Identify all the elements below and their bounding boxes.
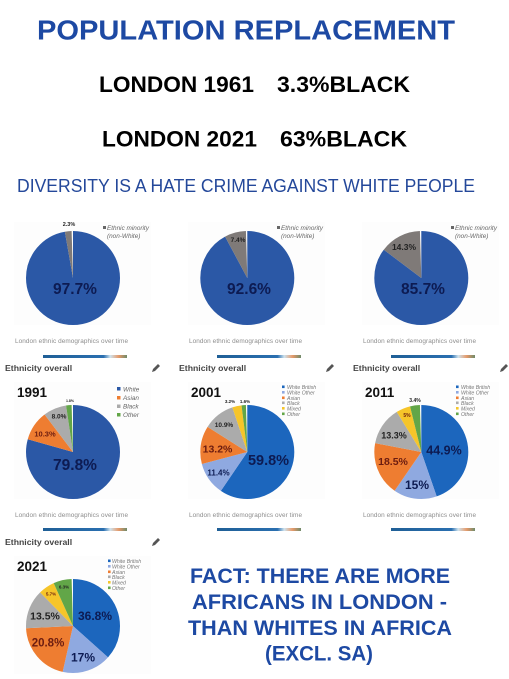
caption: London ethnic demographics over time (363, 512, 476, 519)
value labels: 10.3% (34, 430, 56, 438)
value labels: 1.6% (240, 399, 250, 404)
pie chart: 1961 (50, 254, 96, 302)
pie chart: 2021 (50, 602, 96, 650)
value labels: 8.0% (52, 414, 67, 420)
legend: Other (461, 412, 474, 418)
heading: Ethnicity overall (5, 363, 72, 373)
icon: pencil (500, 364, 508, 372)
legend: Black (287, 401, 300, 407)
legend: White (123, 386, 140, 394)
legend (117, 386, 140, 419)
legend: (non-White) (455, 233, 488, 240)
icon: pencil (326, 364, 334, 372)
legend: White British (287, 385, 316, 391)
legend: Ethnic minority (281, 225, 324, 232)
value labels: 3.4% (409, 398, 421, 404)
heading: Ethnicity overall (179, 363, 246, 373)
value labels: 85.7% (401, 281, 445, 298)
value labels: 44.9% (426, 444, 462, 458)
headline: London 1961: LONDON 1961 (99, 72, 254, 97)
legend: White Other (112, 564, 140, 570)
callout: fact: THAN WHITES IN AFRICA (188, 616, 452, 640)
panel: 1971 pie (188, 222, 325, 358)
panel: 1991 pie (5, 363, 160, 531)
value labels: 1.8% (66, 399, 75, 403)
value labels: 13.3% (381, 430, 407, 440)
legend: Asian (111, 570, 125, 576)
heading: Ethnicity overall (5, 537, 72, 547)
legend (282, 385, 316, 418)
pie chart: 1981 (398, 254, 445, 302)
caption: London ethnic demographics over time (363, 338, 476, 345)
value labels: 14.3% (392, 242, 416, 252)
legend (277, 225, 324, 240)
legend: White British (461, 385, 490, 391)
legend: Mixed (112, 580, 127, 586)
value labels (378, 398, 462, 492)
headline: London 2021: 63%BLACK (280, 126, 408, 152)
value labels: 5.7% (46, 592, 56, 596)
callout: fact: AFRICANS IN LONDON - (192, 590, 447, 614)
panel: 1981 pie (362, 222, 499, 358)
value labels: 20.8% (32, 638, 64, 650)
icon: pencil (152, 364, 160, 372)
value labels: 13.2% (203, 444, 233, 456)
value labels (53, 222, 97, 298)
value labels: 17% (71, 650, 95, 664)
year label: 2011 (365, 385, 395, 400)
heading: Ethnicity overall (353, 363, 420, 373)
value labels: 36.8% (78, 609, 112, 623)
value labels: 92.6% (227, 281, 271, 298)
value labels: 7.4% (231, 237, 246, 244)
legend: White Other (461, 390, 489, 396)
legend: Asian (122, 395, 139, 402)
headline: London 1961: 3.3%BLACK (277, 72, 411, 97)
legend: (non-White) (281, 233, 314, 240)
caption: London ethnic demographics over time (189, 338, 302, 345)
value labels: 13.5% (30, 610, 61, 622)
timeline bar (391, 528, 475, 531)
legend: White Other (287, 390, 315, 396)
value labels: 11.4% (207, 468, 230, 478)
legend: Mixed (461, 406, 476, 412)
year label: 2001 (191, 385, 222, 400)
icon: pencil (152, 538, 160, 546)
caption: London ethnic demographics over time (15, 512, 128, 519)
timeline bar (43, 355, 127, 358)
pie chart: 2001 (224, 428, 271, 476)
panel: 2001 pie (179, 363, 334, 531)
value labels (203, 399, 289, 478)
panel: 1961 pie (14, 222, 151, 358)
legend: White British (112, 559, 141, 565)
legend: Ethnic minority (107, 225, 150, 232)
callout: fact: (EXCL. SA) (265, 642, 373, 666)
panel: 2011 pie (353, 363, 508, 531)
headline: London 2021: LONDON 2021 (102, 126, 257, 152)
legend: Ethnic minority (455, 225, 498, 232)
year label: 1991 (17, 385, 48, 400)
value labels: 18.5% (378, 456, 409, 468)
legend (456, 385, 490, 418)
pie chart: 1971 (224, 255, 271, 302)
legend: Black (461, 401, 474, 407)
callout: fact (188, 564, 452, 666)
panel: 2021 pie (5, 537, 160, 674)
legend (103, 225, 150, 240)
value labels: 2.3% (63, 222, 75, 228)
pie chart: 2011 (398, 428, 445, 476)
legend: Other (112, 586, 125, 592)
value labels: 6.3% (59, 584, 69, 590)
legend: Mixed (287, 406, 302, 412)
value labels: 97.7% (53, 281, 97, 298)
value labels (30, 584, 112, 664)
value labels (227, 237, 271, 298)
timeline bar (391, 355, 475, 358)
headline: London 2021 (102, 126, 408, 152)
legend: Other (287, 412, 300, 418)
value labels: 59.8% (248, 453, 289, 469)
title: POPULATION REPLACEMENT (37, 14, 455, 46)
legend (108, 559, 141, 592)
timeline bar (217, 355, 301, 358)
timeline bar (217, 528, 301, 531)
caption: London ethnic demographics over time (15, 338, 128, 345)
caption: London ethnic demographics over time (189, 512, 302, 519)
value labels: 79.8% (53, 457, 97, 474)
value labels: 3.2% (225, 399, 235, 404)
value labels (392, 242, 445, 298)
value labels: 15% (405, 478, 429, 492)
legend: Black (123, 404, 139, 410)
legend: Asian (286, 396, 300, 402)
headline: London 1961 (99, 72, 411, 97)
pie chart: 1991 (50, 428, 96, 476)
value labels: 5% (403, 413, 411, 419)
timeline bar (43, 528, 127, 531)
value labels (34, 399, 97, 474)
legend: Other (123, 412, 140, 419)
subtitle: DIVERSITY IS A HATE CRIME AGAINST WHITE PEOPLE (17, 175, 475, 196)
year label: 2021 (17, 559, 48, 574)
legend: (non-White) (107, 233, 140, 240)
callout: fact: FACT: THERE ARE MORE (190, 564, 450, 588)
legend: Asian (460, 396, 474, 402)
legend: Black (112, 575, 125, 581)
legend (451, 225, 498, 240)
value labels: 10.9% (215, 422, 233, 429)
